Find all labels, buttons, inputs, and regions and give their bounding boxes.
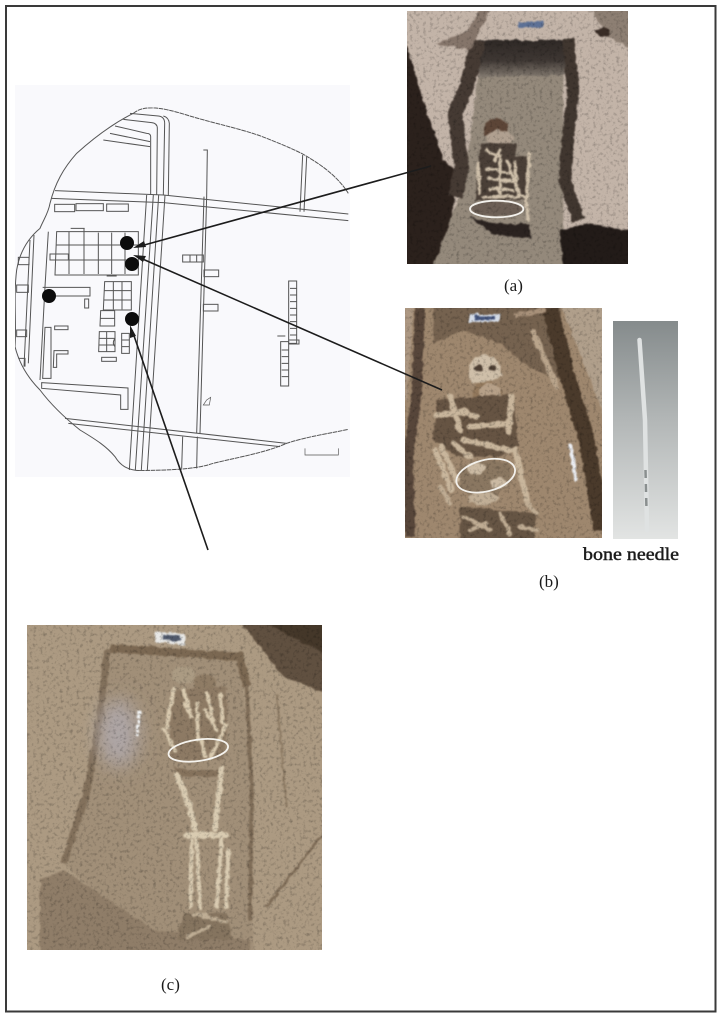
map linework [15,108,348,471]
panel: site map [15,85,350,477]
torso [433,393,518,457]
upper small rectangles [55,204,75,212]
skull and torso [172,667,194,683]
site markers [42,236,139,326]
photo (a): grave with skeleton [407,11,628,264]
skull and jar [468,355,503,383]
scale bar [137,711,139,736]
grid block [55,228,138,275]
left long structures [43,287,90,308]
arrow to photo (a) [133,166,431,248]
second grid block [103,276,131,310]
pelvis and lower bones [458,460,511,496]
photo (b): grave with skeleton [405,308,602,538]
caption (b): (b) [539,572,559,591]
scale bar [570,444,577,482]
marker ellipse [168,738,229,763]
arrow to photo (b) [133,255,442,390]
marker ellipse [455,458,516,494]
legs [173,767,225,777]
marker ellipse [470,201,523,217]
caption (c): (c) [161,975,180,994]
central and right structures [183,255,203,262]
skeleton [485,118,508,135]
caption (a): (a) [504,276,523,295]
scale bar [305,448,338,455]
caption: bone needle: bone needle [583,544,679,564]
arrow to photo (c) [130,325,208,550]
photo: bone needle [613,321,678,539]
long bone [533,332,557,387]
roads [52,191,348,221]
label [155,631,185,645]
photo (c): grave with skeleton [27,625,322,950]
